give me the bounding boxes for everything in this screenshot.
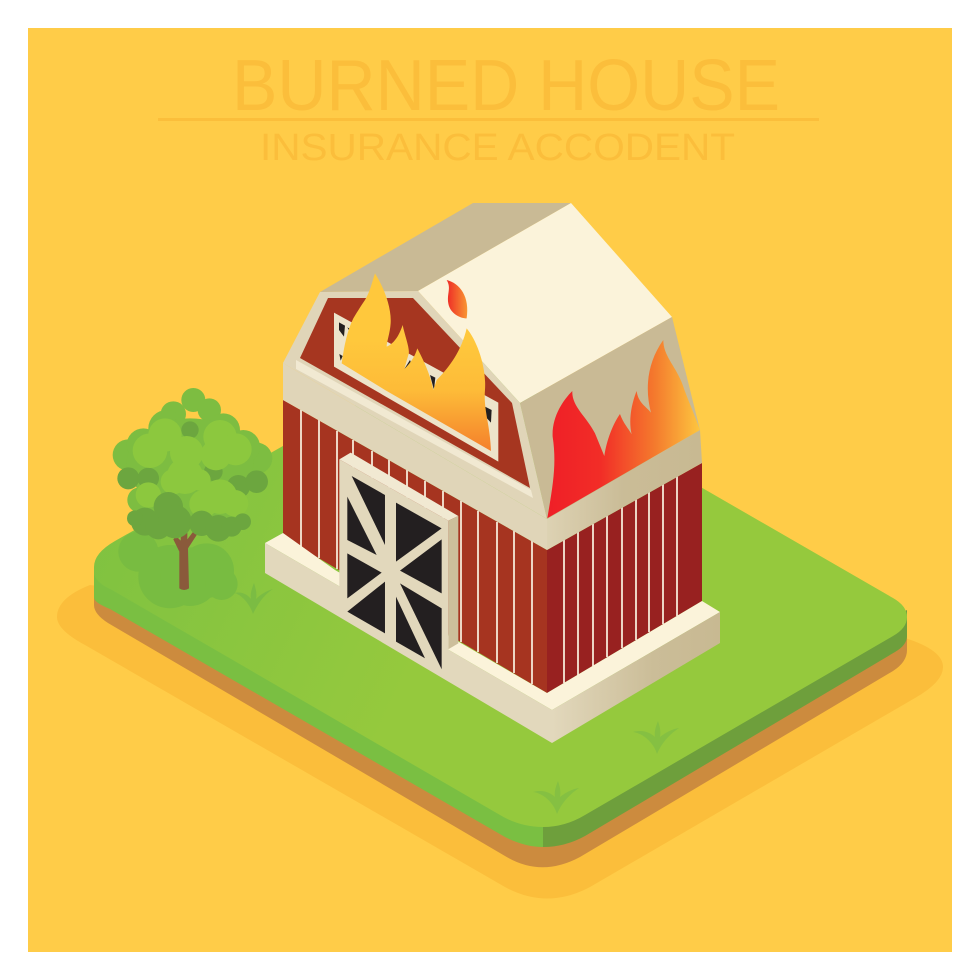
roof band ledge bbox=[296, 360, 533, 498]
small ember flame bbox=[447, 280, 467, 318]
roof band left bbox=[283, 363, 547, 550]
window flame bbox=[342, 273, 491, 451]
roof flame bbox=[547, 340, 700, 518]
hayloft window bbox=[334, 313, 498, 462]
tree bbox=[113, 388, 272, 608]
grass tuft 2 bbox=[633, 721, 679, 754]
upper roof face bbox=[418, 203, 672, 403]
dark mid foliage bbox=[117, 421, 268, 498]
soil layer bbox=[94, 590, 907, 867]
back roof face bbox=[320, 203, 571, 292]
grass top surface bbox=[94, 347, 907, 827]
tree trunk bbox=[173, 528, 197, 590]
gable red wall bbox=[300, 298, 530, 488]
plinth front face bbox=[265, 543, 552, 743]
light foliage bbox=[133, 418, 252, 518]
tree ground shadow bbox=[118, 532, 238, 608]
plinth top bbox=[265, 533, 720, 710]
heading: burned house: BURNED HOUSE bbox=[232, 46, 780, 126]
back foliage bbox=[113, 388, 272, 527]
barn bbox=[265, 203, 720, 743]
title block bbox=[158, 46, 819, 169]
grass side right bbox=[543, 610, 907, 847]
door panes bbox=[347, 476, 442, 669]
wall planks bbox=[301, 410, 677, 684]
grass tuft 1 bbox=[234, 583, 273, 614]
right barn wall bbox=[547, 463, 702, 693]
door face bbox=[339, 459, 448, 673]
left barn wall bbox=[283, 400, 547, 693]
grass side left bbox=[94, 572, 543, 847]
gable cream frame bbox=[283, 291, 547, 519]
dark lower foliage bbox=[127, 492, 251, 542]
lower right roof face bbox=[520, 317, 700, 519]
door top bbox=[339, 453, 458, 521]
barn door bbox=[339, 453, 458, 673]
door side bbox=[448, 516, 458, 649]
roof band right bbox=[547, 430, 702, 550]
ground shadow bbox=[57, 585, 943, 898]
island ground bbox=[94, 347, 907, 867]
plinth right face bbox=[552, 612, 720, 743]
grass tuft 3 bbox=[533, 781, 579, 814]
subtitle: insurance accodent: INSURANCE ACCODENT bbox=[260, 127, 735, 169]
